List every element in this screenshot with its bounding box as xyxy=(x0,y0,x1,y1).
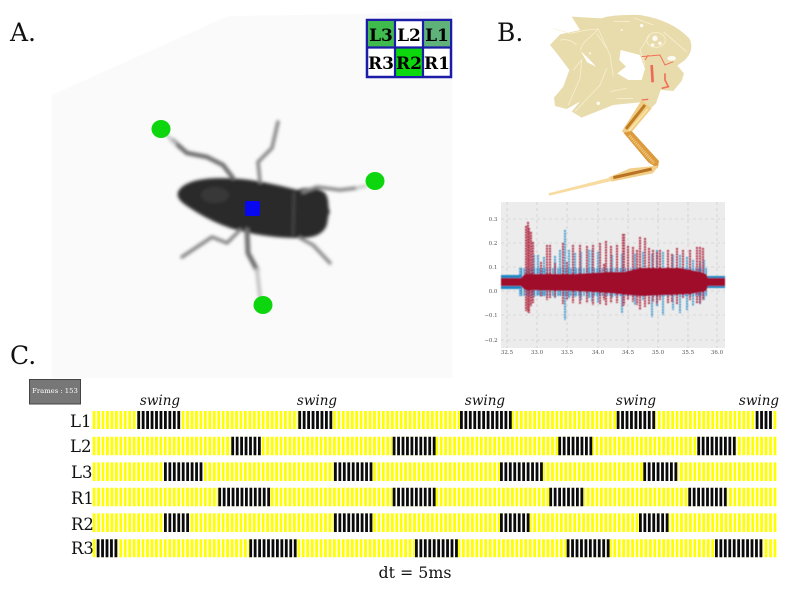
gait chart row L1 xyxy=(93,411,776,429)
label B: B. xyxy=(497,18,523,47)
panel B: electrophysiology trace chart: 0.2 xyxy=(489,241,497,247)
gait chart row R3 xyxy=(93,539,776,557)
red trace xyxy=(526,222,703,313)
panel B: electrophysiology trace chart: 32.5 xyxy=(501,350,514,356)
panel C: swing labels: swing xyxy=(739,393,779,409)
leg segments xyxy=(548,100,659,196)
tracked foot marker xyxy=(366,172,384,190)
gait chart row L3 xyxy=(93,462,776,481)
leg state grid: R3 xyxy=(368,54,394,74)
panel B: fly anatomy drawing xyxy=(548,15,691,196)
panel B: electrophysiology trace chart xyxy=(484,202,725,356)
leg state grid xyxy=(367,20,451,77)
leg state grid: R1 xyxy=(424,54,450,74)
gait chart row R1 xyxy=(93,488,776,506)
leg state grid: L1 xyxy=(425,26,449,46)
panel B: electrophysiology trace chart: 35.5 xyxy=(682,350,695,356)
blue trace xyxy=(501,222,725,320)
label C: C. xyxy=(10,341,36,370)
leg state grid: L3 xyxy=(369,26,393,46)
leg state grid: L2 xyxy=(397,26,421,46)
panel B: electrophysiology trace chart: −0.2 xyxy=(484,338,498,344)
row labels: R2 xyxy=(71,515,94,534)
body centre marker xyxy=(245,201,260,216)
panel B: electrophysiology trace chart: −0.1 xyxy=(484,313,498,319)
panel B: electrophysiology trace chart: 33.0 xyxy=(531,350,544,356)
gait chart row R2 xyxy=(93,513,776,532)
label A: A. xyxy=(9,18,36,47)
panel B: electrophysiology trace chart: 34.5 xyxy=(622,350,635,356)
panel C: frame counter button xyxy=(30,380,80,404)
row labels: R1 xyxy=(71,489,94,508)
panel B: electrophysiology trace chart: 34.0 xyxy=(592,350,605,356)
panel C: swing labels: swing xyxy=(616,393,656,409)
row labels xyxy=(70,412,94,558)
panel B: electrophysiology trace chart: 35.0 xyxy=(652,350,665,356)
row labels: L2 xyxy=(70,437,91,456)
row labels: R3 xyxy=(71,539,94,558)
time step caption: dt = 5ms xyxy=(379,563,451,582)
tracked foot marker xyxy=(254,296,272,314)
panel C: frame counter button: Frames : 153 xyxy=(32,387,78,395)
gait chart row L2 xyxy=(93,437,776,455)
panel A: video frame of fly xyxy=(52,10,452,378)
panel B: electrophysiology trace chart: 0.0 xyxy=(489,289,498,295)
fly silhouette xyxy=(166,122,366,297)
row labels: L3 xyxy=(71,463,92,482)
body xyxy=(550,15,691,118)
panel C: swing labels xyxy=(140,393,779,409)
thoracic muscles in red xyxy=(642,55,673,100)
tracked foot marker xyxy=(152,120,170,138)
panel B: electrophysiology trace chart: 0.3 xyxy=(489,217,498,223)
panel B: electrophysiology trace chart: 0.1 xyxy=(489,265,497,271)
leg state grid: R2 xyxy=(396,54,422,74)
panel C: swing labels: swing xyxy=(297,393,337,409)
panel B: electrophysiology trace chart: 33.5 xyxy=(561,350,574,356)
panel C: swing labels: swing xyxy=(140,393,180,409)
row labels: L1 xyxy=(70,412,91,431)
panel C: swing labels: swing xyxy=(465,393,505,409)
panel B: electrophysiology trace chart: 36.0 xyxy=(711,350,724,356)
